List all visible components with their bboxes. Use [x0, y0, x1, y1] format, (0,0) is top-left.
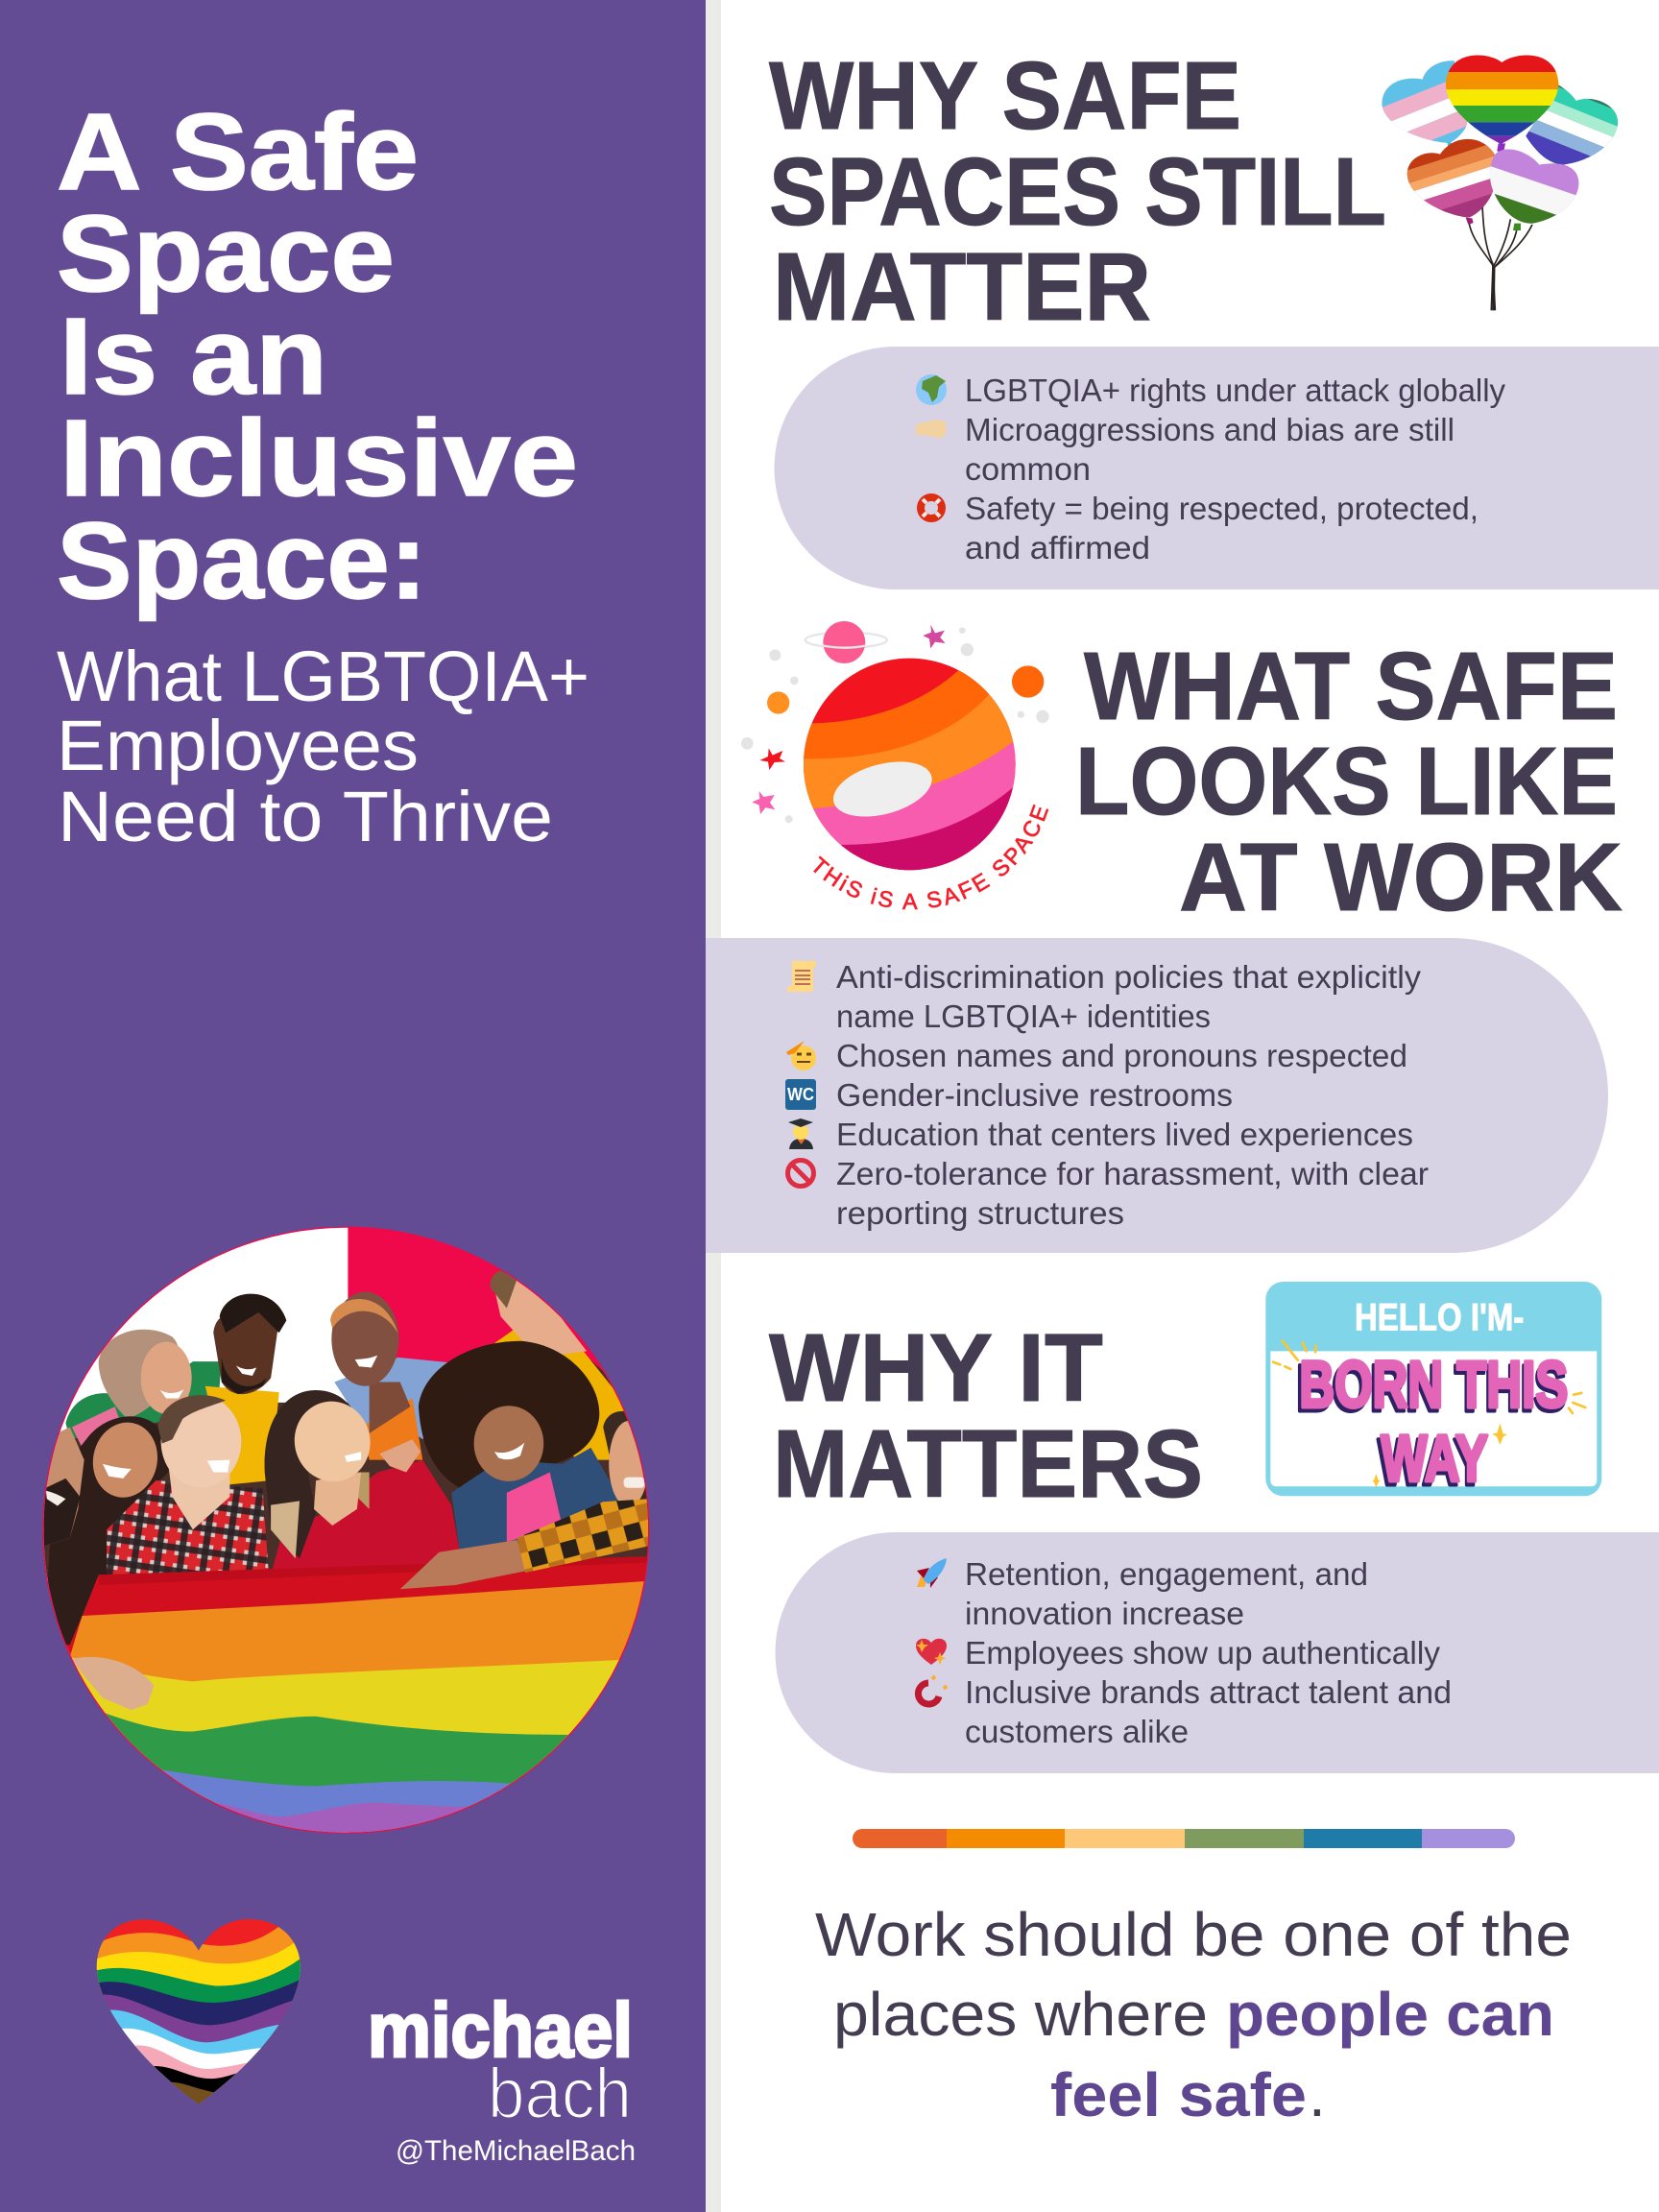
panel: why safe spaces still matter	[775, 347, 1659, 589]
heading: why it matters: MATTERS	[773, 1410, 1203, 1518]
closing statement: .	[1309, 2060, 1326, 2129]
panel: why it matters	[776, 1532, 1659, 1773]
heading: why safe spaces still matter: WHY SAFE	[769, 42, 1241, 150]
woman with orange hair	[334, 1358, 460, 1439]
icon: fist	[916, 420, 947, 439]
heading: what safe looks like at work: WHAT SAFE	[1084, 633, 1618, 740]
rainbow balloon	[1446, 56, 1559, 144]
rainbow flag	[61, 1556, 647, 1770]
mlm balloon	[1526, 84, 1618, 165]
panel: left purple sidebar	[0, 0, 706, 2212]
afro woman	[419, 1341, 599, 1497]
title: A Safe	[57, 91, 419, 212]
man in plaid shirt	[107, 1480, 269, 1575]
tag name text: BORN THIS	[1299, 1348, 1568, 1421]
list text: Chosen names and pronouns respected	[836, 1038, 1407, 1073]
ringed planet	[805, 621, 887, 663]
icon: life buoy	[921, 497, 942, 518]
closing statement: feel safe	[1050, 2060, 1307, 2129]
icon: WC sign	[785, 1079, 816, 1110]
heading: what safe looks like at work	[1075, 633, 1623, 931]
logo wordmark	[368, 1987, 636, 2167]
icon: scroll	[787, 961, 816, 992]
heading: why it matters	[769, 1314, 1203, 1518]
lesbian balloon	[1407, 138, 1495, 218]
green shoulders	[65, 1361, 222, 1439]
heading: what safe looks like at work: LOOKS LIKE	[1075, 728, 1618, 835]
logo wordmark: michael	[368, 1987, 633, 2073]
subtitle: Employees	[57, 706, 419, 785]
long haired woman	[45, 1416, 168, 1632]
logo: progress pride heart	[96, 1919, 301, 2104]
icon: WC sign: WC	[787, 1085, 814, 1104]
rainbow divider bar	[853, 1829, 1515, 1848]
hand and plaid sleeve	[400, 1540, 527, 1589]
list text: Retention, engagement, and	[965, 1556, 1368, 1592]
closing statement: places where	[833, 1980, 1208, 2049]
list text: common	[965, 451, 1091, 487]
list text	[836, 959, 1429, 1231]
illustration: safe space planet	[741, 621, 1048, 910]
right edge person	[603, 1411, 648, 1505]
stars	[752, 625, 946, 814]
title: Space	[57, 193, 395, 314]
list text: reporting structures	[836, 1195, 1124, 1231]
icon: magnet	[918, 1676, 947, 1704]
tag name text: BORN THIS	[1296, 1352, 1567, 1425]
logo wordmark: bach	[488, 2054, 632, 2133]
illustration: safe space planet: THiS iS A SAFE SPACE	[813, 805, 1048, 910]
man in yellow	[205, 1386, 279, 1484]
tag name text: WAY	[1381, 1423, 1488, 1496]
tag name text: WAY	[1378, 1427, 1486, 1500]
heading: why safe spaces still matter	[769, 42, 1386, 341]
hand on flag left	[72, 1657, 154, 1710]
list text: Microaggressions and bias are still	[965, 412, 1455, 447]
list text: name LGBTQIA+ identities	[836, 998, 1211, 1034]
heading: what safe looks like at work: AT WORK	[1179, 824, 1623, 931]
closing statement: people can	[1226, 1980, 1554, 2049]
bearded man	[44, 1427, 84, 1546]
small planets and dots	[741, 627, 1049, 823]
list text	[965, 373, 1505, 565]
illustration: hello name tag	[1265, 1282, 1601, 1500]
list text: and affirmed	[965, 530, 1150, 565]
icon: sparkling heart	[916, 1639, 947, 1665]
woman in red	[271, 1460, 460, 1575]
list text: LGBTQIA+ rights under attack globally	[965, 373, 1505, 408]
closing statement	[815, 1900, 1572, 2129]
heading: why safe spaces still matter: SPACES STILL	[769, 138, 1386, 246]
balloon strings	[1469, 204, 1532, 310]
divider strip	[706, 0, 721, 2212]
closing statement: Work should be one of the	[815, 1900, 1572, 1969]
icon: pride heart balloons	[1382, 56, 1618, 311]
icon: globe	[916, 374, 947, 405]
list text: Inclusive brands attract talent and	[965, 1674, 1452, 1710]
list text: Gender-inclusive restrooms	[836, 1077, 1233, 1113]
subtitle: What LGBTQIA+	[57, 637, 589, 716]
icon: no entry	[787, 1160, 814, 1187]
logo wordmark: @TheMichaelBach	[396, 2135, 636, 2167]
curved caption	[809, 787, 1053, 909]
title: Inclusive	[60, 397, 578, 518]
list text: Anti-discrimination policies that explicitly	[836, 959, 1422, 995]
list text: customers alike	[965, 1714, 1189, 1749]
heading: why it matters: WHY IT	[769, 1314, 1103, 1422]
list text: innovation increase	[965, 1596, 1244, 1631]
tag header text: HELLO I'M-	[1355, 1296, 1524, 1338]
title: Is an	[60, 296, 327, 417]
list text: Zero-tolerance for harassment, with clear	[836, 1156, 1429, 1191]
panel: what safe looks like at work	[706, 938, 1608, 1253]
trans balloon	[1382, 60, 1467, 143]
title	[57, 91, 578, 621]
list text: Safety = being respected, protected,	[965, 491, 1479, 526]
crowd base	[41, 1349, 652, 1579]
subtitle	[57, 637, 589, 856]
list text: Education that centers lived experiences	[836, 1117, 1413, 1152]
subtitle: Need to Thrive	[58, 777, 553, 856]
yellow sparkles	[1273, 1341, 1585, 1487]
list text: Employees show up authentically	[965, 1635, 1440, 1671]
genderqueer balloon	[1490, 150, 1578, 224]
photo: diverse group holding a rainbow flag	[42, 1227, 649, 1834]
title: Space:	[57, 500, 427, 621]
heading: why safe spaces still matter: MATTER	[773, 233, 1151, 341]
icon: graduate	[788, 1118, 813, 1149]
icon: rocket	[917, 1558, 947, 1588]
tag name text	[1296, 1348, 1568, 1500]
hijab woman	[99, 1330, 180, 1419]
top right person	[493, 1331, 628, 1460]
list text	[965, 1556, 1452, 1749]
icon: saluting face	[786, 1041, 816, 1070]
planet body	[800, 656, 1024, 874]
